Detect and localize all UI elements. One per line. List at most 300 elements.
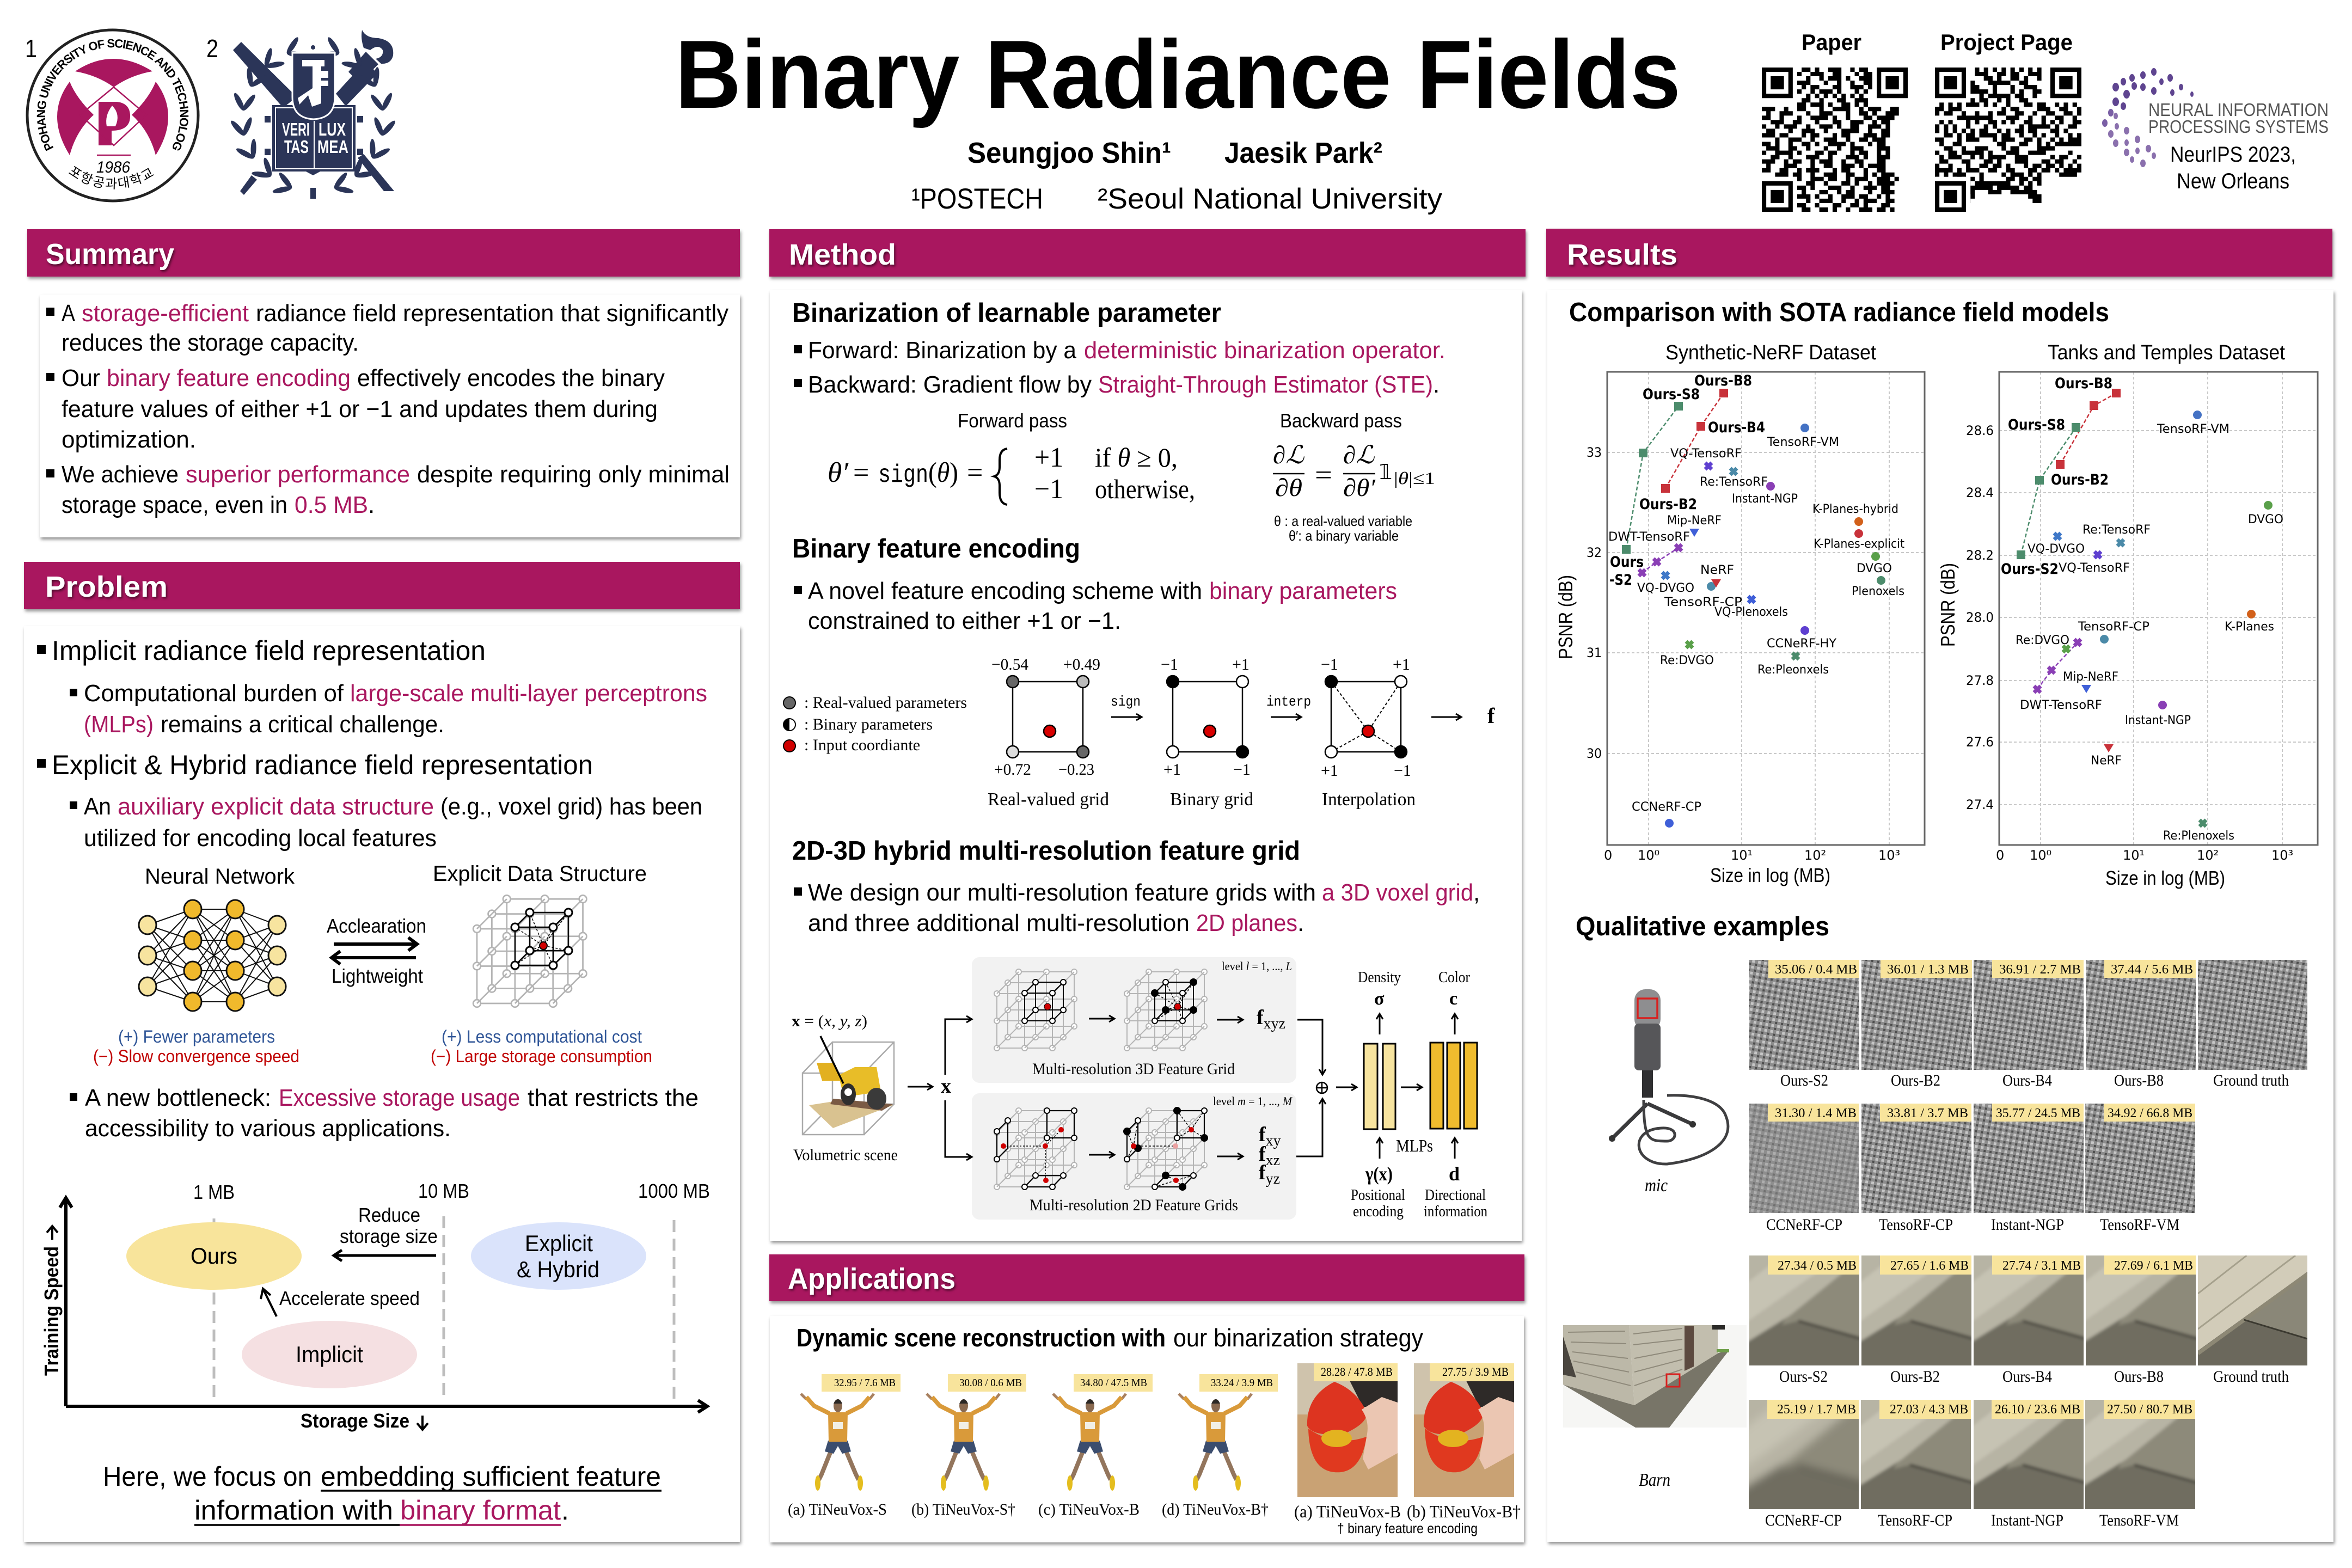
heading: binary feature encoding: Binary feature encoding (792, 534, 1080, 564)
pros and cons: neural network (93, 1027, 299, 1066)
labels: MLP outputs and inputs: σ (1374, 989, 1385, 1009)
legend: grid nodes (783, 694, 967, 754)
labels: MLP outputs and inputs: information (1424, 1203, 1487, 1220)
sub-bullet: MLP burden: (MLPs) (84, 711, 154, 738)
tile: mic ground truth: Ground truth (2213, 1071, 2289, 1089)
point labels: TensoRF-VM (1767, 436, 1839, 449)
note: variables: θ′: a binary variable (1289, 528, 1399, 544)
figure: TiNeuVox-S dagger: (b) TiNeuVox-S† (911, 1500, 1015, 1518)
annotation: reduce storage size (334, 1204, 438, 1261)
bullet: encoding scheme (794, 578, 1397, 634)
bullet: binary feature encoding: effectively encodes the binary (357, 365, 665, 391)
diagram: real-valued grid (991, 656, 1100, 779)
section bar: Problem (24, 562, 740, 609)
equation: forward sign (828, 442, 1195, 505)
tile: barn TensoRF-VM: TensoRF-VM (2099, 1511, 2179, 1529)
figure: TiNeuVox-B: 34.80 / 47.5 MB (1080, 1377, 1147, 1389)
heading: dynamic scene: Dynamic scene reconstruction with (797, 1324, 1166, 1352)
chart: storage vs speed (40, 1180, 710, 1526)
label: backward pass: Backward pass (1280, 409, 1402, 432)
labels: MLP outputs and inputs: Density (1358, 969, 1401, 986)
axis ticks: 32 (1587, 545, 1602, 560)
equation: backward STE: ∂ℒ (1273, 441, 1304, 469)
illustration: barn scene (1563, 1325, 1747, 1490)
heading: hybrid grid: 2D-3D hybrid multi-resolution feature grid (792, 836, 1300, 866)
diagram: interpolation (1321, 656, 1411, 780)
diagram: volumetric scene: x = (x, y, z) (792, 1012, 867, 1030)
tile: mic Instant-NGP (1974, 1104, 2084, 1234)
point labels: Re:DVGO (1660, 654, 1714, 667)
conclusion (103, 1461, 661, 1526)
tile: mic Ours-B4 (1974, 960, 2084, 1089)
point labels: TensoRF-CP (2078, 620, 2149, 634)
author 2: Jaesik Park² (1224, 137, 1382, 169)
motto text: LUX (318, 119, 346, 139)
panel: 2D feature grids: Multi-resolution 2D Feature Grids (1030, 1196, 1238, 1214)
tiles: mic row 1 (1749, 960, 2307, 1089)
labels: MLP outputs and inputs: c (1449, 989, 1457, 1009)
point labels: Ours-S8 (2008, 416, 2065, 433)
tile: mic TensoRF-VM: 34.92 / 66.8 MB (2108, 1106, 2192, 1120)
point labels: CCNeRF-CP (1632, 800, 1701, 814)
diagram: explicit voxel grid (473, 895, 586, 1007)
bullet: backward: . (1433, 371, 1440, 398)
panel: 3D feature grid (972, 957, 1296, 1083)
sub-bullet: new bottleneck (70, 1085, 699, 1142)
point labels: K-Planes (2225, 620, 2274, 634)
captions: grids: Real-valued grid (988, 789, 1109, 810)
axis ticks: 28.4 (1966, 485, 1994, 500)
point labels: VQ-TensoRF (2059, 561, 2130, 575)
section bar: Results: Results (1567, 238, 1677, 271)
emblem (57, 59, 168, 155)
annotation: reduce storage size: storage size (340, 1225, 438, 1247)
section bar: Results (1546, 229, 2332, 277)
panel: 2D feature grids: xz (1266, 1152, 1280, 1169)
bullet: implicit representation: Implicit radiance field representation (52, 635, 486, 666)
equation: forward sign: +1 (1034, 442, 1063, 473)
arrows: acceleration and lightweight: Lightweight (332, 965, 423, 987)
photo: tomato TiNeuVox-B (1294, 1363, 1401, 1521)
bullet: multi-resolution grids: a 3D voxel grid (1322, 879, 1473, 906)
footnote: † binary feature encoding (1337, 1520, 1478, 1536)
logo dots (2102, 68, 2194, 167)
tile: mic Ours-B2: Ours-B2 (1891, 1071, 1940, 1089)
affiliation POSTECH: ¹POSTECH (911, 183, 1043, 215)
bubble: Explicit and Hybrid: Explicit (525, 1230, 593, 1256)
venue: New Orleans (2177, 169, 2289, 193)
bullet: explicit and hybrid representation: Explicit & Hybrid radiance field representation (52, 750, 593, 780)
equation: backward STE: |θ|≤1 (1394, 468, 1435, 488)
point labels: Ours-S8 (1643, 386, 1700, 403)
diagram: interpolation: +1 (1393, 656, 1410, 673)
labels: MLP outputs and inputs: Directional (1425, 1187, 1486, 1204)
section bar: Applications (769, 1254, 1524, 1301)
diagram: real-valued grid: +0.49 (1063, 656, 1100, 673)
bullet: storage-efficient: reduces the storage capacity. (62, 329, 359, 356)
tile: mic TensoRF-CP: TensoRF-CP (1879, 1216, 1953, 1234)
diagram: neural network (139, 900, 286, 1011)
QR code: paper (1762, 68, 1908, 212)
equation: forward sign: if θ ≥ 0, (1095, 442, 1178, 473)
point labels: -S2 (1609, 572, 1632, 589)
point labels (1608, 372, 1904, 814)
panel: 3D feature grid: Multi-resolution 3D Feature Grid (1032, 1060, 1235, 1078)
bullet: binary feature encoding: optimization. (62, 426, 196, 453)
tile: barn TensoRF-VM (2069, 1383, 2211, 1529)
equation: backward STE: = (1315, 460, 1332, 490)
annotation: accelerate speed: Accelerate speed (279, 1287, 420, 1309)
arrow: to feature f (1431, 703, 1495, 728)
bullet: storage-efficient (46, 300, 728, 356)
bullet: multi-resolution grids: 2D planes (1196, 910, 1297, 936)
panel: results (1546, 229, 2333, 1542)
axis ticks: 31 (1587, 645, 1602, 660)
bullet: forward (794, 337, 1445, 364)
sub-bullet: auxiliary data structure (70, 793, 702, 852)
heading: neural network: Neural Network (145, 865, 295, 889)
panel: 3D feature grid: level l = 1, ..., L (1222, 959, 1292, 973)
point labels: TensoRF-CP (1664, 596, 1742, 609)
arrow: interp (1266, 694, 1311, 720)
point labels: Mip-NeRF (1667, 514, 1722, 528)
chart: Synthetic-NeRF (1554, 341, 1925, 886)
tiles: mic row 2 (1749, 1104, 2195, 1234)
label: forward pass: Forward pass (958, 409, 1067, 432)
axis ticks: 28.6 (1966, 423, 1994, 438)
bullet: backward (794, 371, 1440, 398)
arrow: scene to x: x (941, 1075, 951, 1098)
bullet: multi-resolution grids: , (1473, 879, 1480, 906)
sub-bullet: MLP burden (70, 680, 707, 738)
sub-bullet: auxiliary data structure: utilized for encoding local features (84, 825, 437, 852)
panel: method (769, 229, 1526, 1241)
diagram: binary grid: −1 (1161, 656, 1178, 673)
arrows: acceleration and lightweight (327, 915, 426, 987)
sub-bullet: new bottleneck: A new bottleneck: (85, 1085, 271, 1111)
motto text: VERI (282, 119, 310, 139)
point labels: Instant-NGP (1732, 492, 1798, 506)
axes (60, 1198, 707, 1412)
logo: POSTECH seal (26, 28, 199, 203)
bullet: encoding scheme: A novel feature encoding scheme with (808, 578, 1202, 604)
labels: MLP outputs and inputs: Positional (1351, 1187, 1405, 1204)
section bar: Summary (27, 229, 740, 277)
diagram: binary grid: +1 (1163, 761, 1181, 779)
tile: mic TensoRF-CP (1861, 1104, 1971, 1234)
point labels: DVGO (2248, 513, 2283, 526)
tile: mic Ours-B8: 37.44 / 5.6 MB (2111, 963, 2193, 977)
bullet: binary feature encoding: feature values of either +1 or −1 and updates them during (62, 396, 658, 422)
legend: grid nodes: : Binary parameters (804, 715, 933, 733)
tick: 1 MB: 1 MB (193, 1181, 235, 1203)
tile: barn CCNeRF-CP: 25.19 / 1.7 MB (1777, 1402, 1856, 1417)
pros and cons: neural network: (−) Slow convergence speed (93, 1046, 299, 1066)
point labels: Ours (1610, 554, 1644, 571)
tile: barn TensoRF-CP: TensoRF-CP (1878, 1511, 1952, 1529)
arrow: scene to x (908, 1075, 951, 1098)
point labels: VQ-Plenoxels (1714, 605, 1788, 619)
axis ticks: 10³ (1878, 848, 1900, 863)
equation: forward sign: θ′ (828, 457, 849, 488)
tile: barn CCNeRF-CP: CCNeRF-CP (1765, 1511, 1842, 1529)
equation: forward sign: sign (878, 461, 928, 489)
y axis title: Training Speed (40, 1246, 63, 1376)
bubble: Implicit: Implicit (296, 1342, 363, 1367)
tile: barn ground truth: Ground truth (2213, 1368, 2289, 1386)
bubble: Explicit and Hybrid (471, 1222, 646, 1290)
tile: mic TensoRF-VM (2085, 1104, 2195, 1234)
tile: barn Ours-B8 (2069, 1239, 2212, 1386)
figure: TiNeuVox-B dagger: 33.24 / 3.9 MB (1211, 1377, 1273, 1389)
panel: 2D feature grids: level m = 1, ..., M (1213, 1094, 1293, 1108)
illustration: barn scene: Barn (1639, 1470, 1670, 1490)
heading: dynamic scene (797, 1324, 1423, 1352)
diagram: real-valued grid: −0.23 (1058, 761, 1094, 779)
legend: grid nodes: : Real-valued parameters (804, 694, 967, 712)
labels: MLP outputs and inputs: γ(x) (1365, 1163, 1393, 1185)
axis ticks: 10⁰ (1638, 848, 1659, 863)
conclusion: embedding sufficient feature (321, 1461, 661, 1492)
heading: explicit data structure: Explicit Data Structure (433, 862, 647, 886)
arrow: interp: interp (1266, 694, 1311, 710)
tile: barn Ours-B2: Ours-B2 (1890, 1368, 1940, 1386)
pros and cons: explicit structure: (+) Less computational cost (442, 1027, 642, 1046)
chart title: Tanks and Temples Dataset (2048, 341, 2285, 364)
axis ticks: 0 (1604, 848, 1612, 863)
bubble: Explicit and Hybrid: & Hybrid (517, 1257, 599, 1282)
tile: barn Ours-B2: 27.65 / 1.6 MB (1890, 1259, 1969, 1273)
illustration: mic scene: mic (1645, 1175, 1668, 1196)
bullet: superior performance: superior performance (186, 461, 410, 488)
point labels: Ours-S2 (2001, 561, 2059, 578)
arrow: to feature f: f (1487, 703, 1495, 728)
tile: barn Ours-B8: 27.69 / 6.1 MB (2114, 1259, 2193, 1273)
panel: 2D feature grids: f (1259, 1143, 1266, 1166)
bullet: storage-efficient: radiance field representation that significantly (256, 300, 728, 327)
equation: forward sign: −1 (1034, 474, 1063, 505)
annotation: accelerate speed (261, 1287, 420, 1316)
tile: mic CCNeRF-CP (1749, 1104, 1859, 1234)
labels: MLP outputs and inputs: MLPs (1396, 1136, 1433, 1155)
tile: mic Instant-NGP: 35.77 / 24.5 MB (1996, 1106, 2080, 1120)
conclusion: . (561, 1495, 569, 1526)
Korean name: 포항공과대학교 (69, 166, 154, 189)
bullet: storage-efficient: A (62, 300, 76, 327)
bullet: multi-resolution grids: and three additional multi-resolution (808, 910, 1190, 936)
tile: barn TensoRF-CP (1845, 1383, 1987, 1529)
figure: TiNeuVox-S dagger: 30.08 / 0.6 MB (959, 1377, 1022, 1389)
axis ticks: 10² (2197, 848, 2219, 863)
y axis title: PSNR (dB) (1937, 563, 1959, 647)
point labels: Ours-B2 (1639, 496, 1697, 513)
x axis title: Storage Size (301, 1410, 409, 1432)
bullet: binary feature encoding (46, 365, 665, 453)
tile: barn Ours-S2: Ours-S2 (1779, 1368, 1828, 1386)
figure: TiNeuVox-S: (a) TiNeuVox-S (788, 1500, 887, 1518)
equation: backward STE: 𝟙 (1379, 460, 1392, 484)
point labels: Plenoxels (1852, 585, 1904, 598)
labels: MLP outputs and inputs: d (1449, 1163, 1460, 1185)
label: affiliation 1: 1 (25, 34, 37, 63)
photo: tomato TiNeuVox-B: (a) TiNeuVox-B (1294, 1502, 1401, 1521)
tile: mic Ours-S2: 35.06 / 0.4 MB (1775, 963, 1857, 977)
sub-bullet: new bottleneck: Excessive storage usage (279, 1085, 520, 1111)
affiliation SNU: ²Seoul National University (1098, 183, 1443, 215)
point labels: Re:DVGO (2016, 634, 2069, 647)
equation: forward sign: (θ) (928, 457, 958, 488)
tile: barn Ours-B4: Ours-B4 (2002, 1368, 2052, 1386)
diagram: volumetric scene: Volumetric scene (793, 1146, 898, 1164)
figure: TiNeuVox-B dagger (1162, 1374, 1278, 1518)
bullet: encoding scheme: binary parameters (1209, 578, 1397, 604)
point labels: Re:Plenoxels (2163, 829, 2234, 843)
tile: barn ground truth (2198, 1255, 2307, 1386)
axis ticks: 10² (1804, 848, 1826, 863)
bullet: superior performance: We achieve (62, 461, 179, 488)
panel: 2D feature grids: xy (1266, 1132, 1281, 1149)
point labels: Ours-B2 (2051, 471, 2109, 488)
title: Binary Radiance Fields (675, 20, 1681, 128)
section bar: Applications: Applications (788, 1263, 955, 1295)
labels: MLP outputs and inputs: encoding (1353, 1203, 1404, 1220)
conclusion: Here, we focus on (103, 1461, 312, 1492)
sub-bullet: MLP burden: remains a critical challenge. (161, 711, 444, 738)
logo: Seoul National University (229, 30, 397, 200)
bullet: binary feature encoding: binary feature encoding (107, 365, 351, 391)
logo: NeurIPS (2102, 68, 2329, 167)
point labels: K-Planes-hybrid (1812, 503, 1898, 516)
logo wordmark line 1: NEURAL INFORMATION (2148, 100, 2329, 120)
bullet: superior performance (46, 461, 730, 518)
axis ticks: 28.2 (1966, 548, 1994, 563)
sub-bullet: new bottleneck: that restricts the (528, 1085, 699, 1111)
diagram: MLP bars (1364, 1014, 1477, 1159)
axis ticks: 33 (1587, 445, 1602, 460)
arrows: acceleration and lightweight: Acclearation (327, 915, 426, 937)
markers (2034, 411, 2273, 826)
bullet: forward: Forward: Binarization by a (808, 337, 1076, 364)
heading: dynamic scene: our binarization strategy (1173, 1324, 1423, 1352)
axis ticks (1587, 445, 1900, 863)
panel: applications (769, 1254, 1524, 1542)
section bar: Method (769, 229, 1526, 277)
bullet: multi-resolution grids (794, 879, 1480, 936)
point labels: VQ-DVGO (2028, 542, 2085, 556)
equation: forward sign: = (967, 457, 983, 488)
diagram: interpolation: −1 (1394, 762, 1411, 780)
point labels: CCNeRF-HY (1767, 637, 1837, 651)
point labels: Ours-B4 (1708, 419, 1765, 436)
point labels: VQ-TensoRF (1670, 447, 1742, 461)
y axis title: PSNR (dB) (1554, 575, 1577, 659)
pros and cons: explicit structure (431, 1027, 652, 1066)
point labels: Re:TensoRF (1700, 475, 1768, 489)
note: variables: θ : a real-valued variable (1274, 513, 1412, 529)
bullet: backward: Backward: Gradient flow by (808, 371, 1092, 398)
tiles: barn row 2 (1733, 1383, 2211, 1529)
sub-bullet: auxiliary data structure: An (84, 793, 111, 820)
arrow: sign: sign (1111, 694, 1141, 710)
label: affiliation 2: 2 (206, 34, 218, 63)
panel: 2D feature grids: f (1259, 1123, 1266, 1146)
sub-bullet: new bottleneck: accessibility to various applications. (85, 1115, 451, 1142)
point labels: K-Planes-explicit (1814, 537, 1904, 551)
diagram: binary grid (1161, 656, 1251, 779)
tile: barn Instant-NGP: Instant-NGP (1991, 1511, 2063, 1529)
bullet: superior performance: . (368, 492, 375, 518)
bullet: encoding scheme: constrained to either +1 or −1. (808, 608, 1121, 634)
point labels: VQ-DVGO (1637, 581, 1694, 595)
axis ticks: 10¹ (2123, 848, 2145, 863)
motto text: MEA (317, 137, 348, 157)
tile: barn Ours-B4 (1957, 1239, 2100, 1386)
point labels: NeRF (1700, 564, 1734, 577)
bullet: storage-efficient: storage-efficient (82, 300, 249, 327)
point labels: Re:Pleonxels (1757, 663, 1829, 677)
axis ticks: 10⁰ (2030, 848, 2051, 863)
diagram: real-valued grid: −0.54 (991, 656, 1028, 673)
axis ticks: 30 (1587, 746, 1602, 761)
point labels: Re:TensoRF (2082, 523, 2151, 537)
series: ours (2017, 389, 2121, 689)
tile: mic Ours-S2 (1749, 960, 1859, 1089)
conclusion: information with (194, 1495, 393, 1526)
bubble: Implicit (242, 1321, 417, 1388)
axis ticks: 27.6 (1966, 734, 1994, 750)
tiles: barn row 1 (1733, 1239, 2307, 1386)
tile: barn Ours-S2: 27.34 / 0.5 MB (1778, 1259, 1857, 1273)
point labels: Ours-B8 (2055, 375, 2112, 392)
bullet: binary feature encoding: Our (62, 365, 100, 391)
tile: barn Ours-B4: 27.74 / 3.1 MB (2002, 1259, 2081, 1273)
equation: backward STE: ∂θ′ (1343, 474, 1376, 501)
captions: grids (988, 789, 1416, 810)
QR code: project page (1935, 68, 2081, 212)
tile: mic TensoRF-VM: TensoRF-VM (2100, 1216, 2179, 1234)
conclusion: binary format (400, 1495, 561, 1526)
heading: qualitative: Qualitative examples (1576, 912, 1829, 941)
tile: barn CCNeRF-CP (1733, 1383, 1875, 1529)
panel: 3D feature grid: f (1257, 1006, 1264, 1029)
captions: grids: Interpolation (1322, 789, 1416, 810)
panel: 2D feature grids: yz (1266, 1171, 1280, 1187)
diagram: interpolation: +1 (1321, 762, 1338, 780)
panel: 2D feature grids: f (1259, 1161, 1266, 1184)
point labels: Ours-B8 (1694, 372, 1752, 389)
diagram: volumetric scene (792, 1012, 898, 1164)
bullet: multi-resolution grids: . (1297, 910, 1304, 936)
figure: TiNeuVox-B: (c) TiNeuVox-B (1038, 1500, 1140, 1518)
x axis title: Size in log (MB) (2105, 867, 2225, 889)
tick: 10 MB: 10 MB (418, 1180, 469, 1202)
axis ticks: 28.0 (1966, 610, 1994, 625)
diagram: real-valued grid: +0.72 (994, 761, 1031, 779)
tile: barn TensoRF-VM: 27.50 / 80.7 MB (2107, 1402, 2192, 1417)
equation: forward sign: otherwise, (1095, 474, 1195, 504)
markers (1639, 424, 1885, 828)
photo: tomato TiNeuVox-B dagger (1407, 1363, 1521, 1521)
labels: MLP outputs and inputs (1351, 969, 1487, 1220)
label: Project Page QR: Project Page (1940, 29, 2073, 55)
equation: forward sign: = (853, 457, 869, 488)
equation: backward STE: ∂ℒ (1343, 441, 1375, 469)
panel: 2D feature grids (972, 1093, 1296, 1220)
tile: barn Ours-B2 (1845, 1239, 1988, 1386)
diagram: binary grid: +1 (1232, 656, 1250, 673)
arrow: sign (1111, 694, 1142, 720)
tile: mic Ours-B4: Ours-B4 (2002, 1071, 2052, 1089)
